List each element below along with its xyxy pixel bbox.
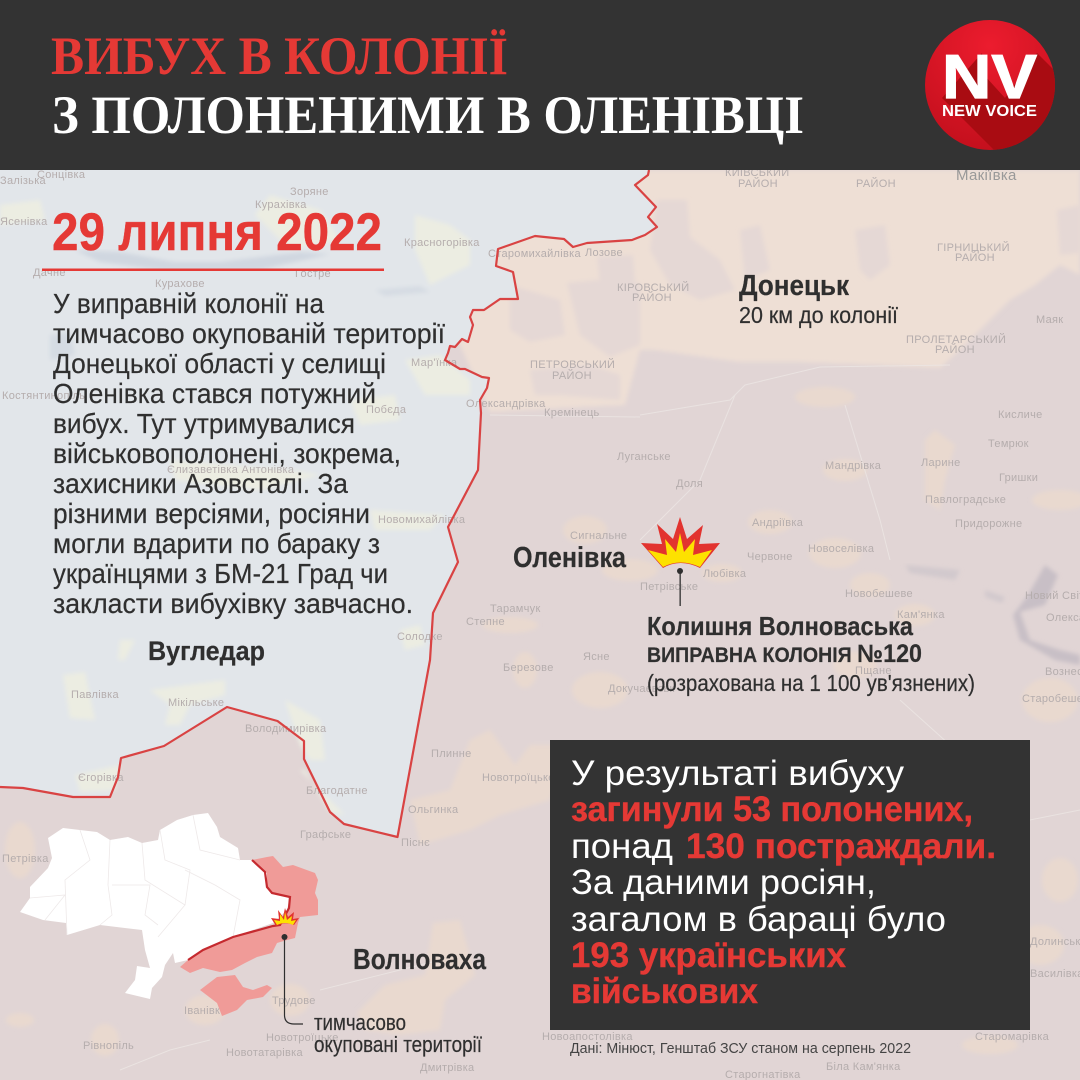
label: Донецьк: Донецьк (739, 270, 849, 302)
map: place names: Ларине (921, 457, 961, 469)
label: colony (647, 611, 975, 696)
map: place names: Старомарівка (975, 1031, 1050, 1043)
inset: front line (188, 860, 290, 960)
label: Волноваха: Волноваха (353, 944, 487, 976)
map: place names: Курахове (155, 278, 205, 290)
NV logo: NV (942, 43, 1037, 112)
legend: occupied territories (282, 934, 482, 1057)
description text: вибух. Тут утримувалися (53, 408, 355, 439)
map: place names: КИЇВСЬКИЙ (725, 166, 789, 179)
title (51, 26, 804, 145)
map: place names: Пщане (855, 665, 892, 677)
map: place names: Тарамчук (490, 603, 541, 615)
description text: могли вдарити по бараку з (53, 528, 380, 559)
map: place names: Трудове (272, 995, 316, 1007)
NV logo: NEW VOICE (942, 103, 1037, 120)
map: place names: Зоряне (290, 186, 329, 198)
map: place names: Дмитрівка (420, 1062, 475, 1074)
inset: free Ukraine (20, 813, 290, 999)
map: Kurakhove reservoir (75, 250, 330, 270)
map: place names: РАЙОН (955, 251, 995, 264)
map: place names: Павлоградське (925, 494, 1006, 506)
description text: захисники Азовсталі. За (53, 468, 348, 499)
label: Донецьк (739, 270, 899, 328)
inset: region borders (30, 815, 240, 937)
map: place names: Луганське (617, 451, 671, 463)
map: settlements on the Ukrainian side (0, 195, 470, 815)
map: place names: Старомихайлівка (488, 248, 582, 260)
map: place names: Володимирівка (245, 723, 327, 735)
map: place names: Кисличе (998, 409, 1043, 421)
map: place names: Новомихайлівка (378, 514, 466, 526)
callout: casualties: загалом в бараці було (571, 900, 946, 939)
map: place names: Солодке (397, 631, 443, 643)
map: place names: Кам'янка (897, 609, 945, 621)
map: place names: Графське (300, 829, 351, 841)
label: colony: ВИПРАВНА КОЛОНІЯ №120 (647, 640, 922, 668)
map: place names: КІРОВСЬКИЙ (617, 281, 689, 294)
map: place names: Новотатарівка (226, 1047, 304, 1059)
map: place names: Єгорівка (78, 772, 124, 784)
title: З ПОЛОНЕНИМИ В ОЛЕНІВЦІ (52, 85, 804, 145)
description text: закласти вибухівку завчасно. (53, 588, 413, 619)
description text: українцями з БМ-21 Град чи (53, 558, 388, 589)
map: area under Ukrainian control (0, 170, 657, 837)
inset map of Ukraine (20, 813, 318, 1016)
description text: Донецької області у селищі (53, 348, 386, 379)
map: peach urban area around Donetsk (440, 170, 1080, 412)
map: place names: Докучаєвськ (608, 683, 675, 695)
header bar (0, 0, 1080, 170)
description text (53, 288, 445, 619)
map: place names: Благодатне (306, 785, 368, 797)
map: lower settlements (5, 387, 1080, 1056)
map: place names: РАЙОН (552, 369, 592, 382)
label: Вугледар: Вугледар (148, 636, 265, 666)
callout: casualties: У результаті вибуху (571, 754, 905, 793)
map: place names: Іванівка (184, 1005, 227, 1017)
map: place names: Гостре (295, 268, 331, 280)
map: place names: Новоселівка (808, 543, 875, 555)
map: place names: Березове (503, 662, 554, 674)
map: place names: Мікільське (168, 697, 224, 709)
callout: casualties (550, 740, 1030, 1030)
title: ВИБУХ В КОЛОНІЇ (51, 26, 508, 86)
map: place names: РАЙОН (856, 177, 896, 190)
map: place names: Мандрівка (825, 460, 882, 472)
inset: explosion (271, 908, 299, 926)
map: place names: Ясенівка (0, 216, 48, 228)
legend: occupied territories: тимчасово (314, 1010, 406, 1035)
map: place names: Макіївка (956, 167, 1017, 184)
map: grey patches inside the urban area (510, 200, 1080, 400)
description text: військовополонені, зокрема, (53, 438, 401, 469)
front line (0, 170, 657, 837)
map: place names: Дачне (33, 267, 66, 279)
callout: casualties: військових (571, 972, 759, 1011)
map: place names: Сигнальне (570, 530, 627, 542)
map: place names: Ясне (583, 651, 610, 663)
map: place names: РАЙОН (738, 177, 778, 190)
map: place names: Новотроїцьке (482, 772, 555, 784)
description text: тимчасово окупованій території (53, 318, 445, 349)
map: place names: Плинне (431, 748, 472, 760)
map: reservoir in the south-east (1013, 565, 1080, 665)
label: Оленівка: Оленівка (513, 542, 627, 574)
callout: casualties: понад (571, 827, 673, 866)
map: place names: Олександрівка (466, 398, 546, 410)
map: place names: Гришки (999, 472, 1038, 484)
map: place names: РАЙОН (935, 343, 975, 356)
map: place names: Ольгинка (408, 804, 459, 816)
map: place names: Новобешеве (845, 588, 913, 600)
date heading: 29 липня 2022 (52, 203, 382, 262)
map: place names: Мар'їнка (411, 357, 458, 369)
map: place names: Курахівка (255, 199, 307, 211)
map: place names: ПРОЛЕТАРСЬКИЙ (906, 333, 1006, 346)
map: place names: Кремінець (544, 407, 600, 419)
map: place names: Маяк (1036, 314, 1063, 326)
map: place names: Темрюк (988, 438, 1029, 450)
map: place names: Доля (676, 478, 703, 490)
callout: casualties: 130 постраждали. (686, 827, 996, 866)
map: place names: Біла Кам'янка (826, 1061, 901, 1073)
legend: occupied territories: окуповані території (314, 1032, 482, 1057)
map: place names: Лозове (585, 247, 623, 259)
map: place names: Рівнопіль (83, 1040, 134, 1052)
map: place names: Піснє (401, 837, 430, 849)
callout: casualties: За даними росіян, (571, 863, 876, 902)
map: place names: ГІРНИЦЬКИЙ (937, 241, 1010, 254)
map: place names: Єлизаветівка Антонівка (167, 464, 295, 476)
map: place names: Новоапостолівка (542, 1031, 633, 1043)
map: place names: Червоне (747, 551, 793, 563)
label: colony: Колишня Волноваська (647, 611, 913, 641)
label: colony: (розрахована на 1 100 ув'язнених) (647, 670, 975, 696)
map: roads (120, 365, 1080, 1070)
map: place names: Петрівське (640, 581, 698, 593)
map: place names: Павлівка (71, 689, 119, 701)
map: place names: ПЕТРОВСЬКИЙ (530, 358, 615, 371)
map: place names: Любівка (703, 568, 747, 580)
callout: casualties: загинули 53 полонених, (571, 790, 973, 829)
inset: occupied territories (180, 856, 318, 973)
map: place names: Костянтинопіль (2, 390, 85, 402)
map: place names: Сонцівка (37, 169, 86, 181)
map: place names: Побєда (366, 404, 407, 416)
map: place names: Красногорівка (404, 237, 480, 249)
map: place names: Придорожне (955, 518, 1022, 530)
NV logo (925, 20, 1060, 151)
map: place names: РАЙОН (632, 291, 672, 304)
map: place names: Новотроїцьке (266, 1032, 339, 1044)
description text: Оленівка стався потужний (53, 378, 376, 409)
map: place names: Петрівка (2, 853, 49, 865)
label: Донецьк: 20 км до колонії (739, 302, 899, 328)
description text: різними версіями, росіяни (53, 498, 370, 529)
icon: explosion at the colony (641, 517, 720, 606)
map: place names: Андріївка (752, 517, 804, 529)
source note: Дані: Мінюст, Генштаб ЗСУ станом на серпень 2022 (570, 1040, 911, 1057)
callout: casualties: 193 українських (571, 936, 847, 975)
map: place names: Степне (466, 616, 505, 628)
map: place names: Залізька (0, 175, 47, 187)
description text: У виправній колонії на (53, 288, 324, 319)
